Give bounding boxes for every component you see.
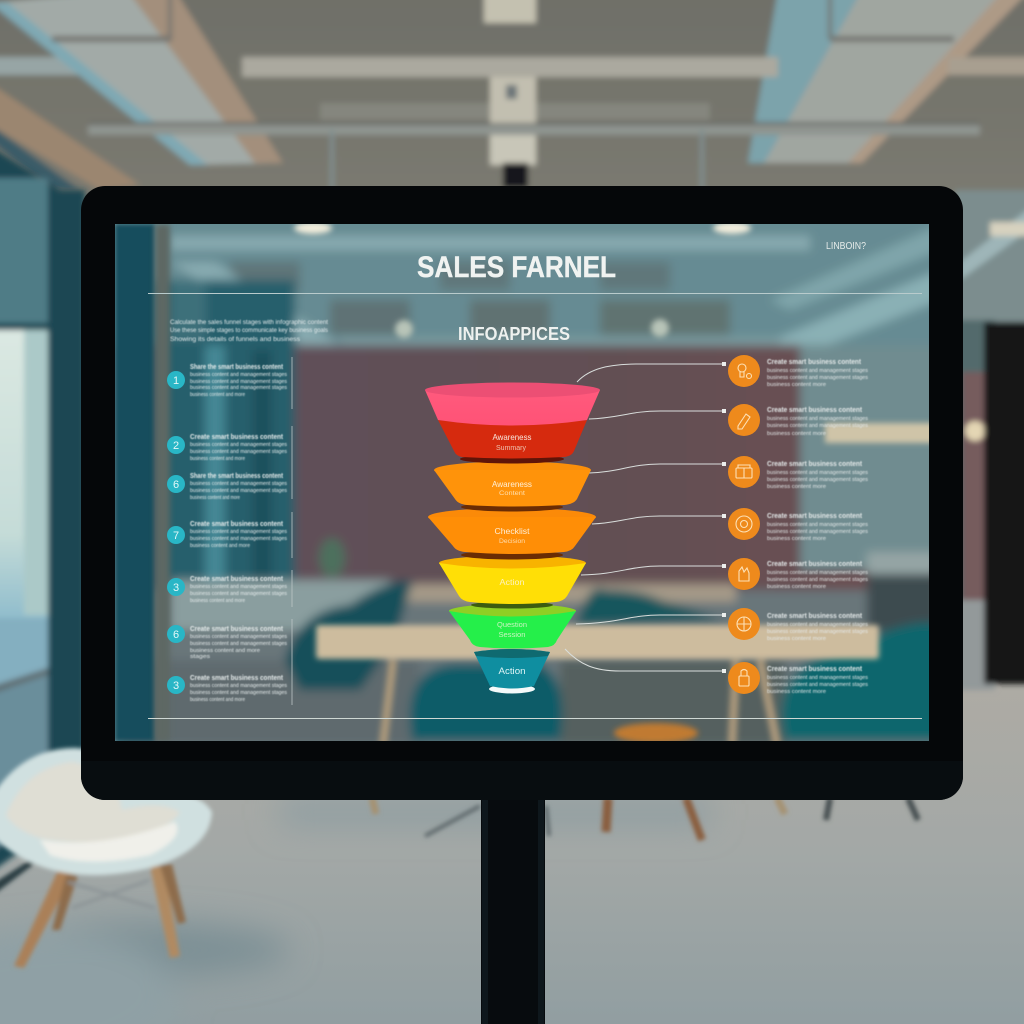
left item 6: Create smart business content [190, 626, 284, 633]
right item 1: business content and management stages [767, 368, 868, 374]
left item 6: stages [190, 654, 210, 660]
intro paragraph: Showing its details of funnels and business [170, 336, 301, 343]
divider top [148, 293, 922, 294]
right item 1: business content more [767, 382, 826, 388]
right item 3 [728, 456, 868, 490]
floor shadows [0, 800, 710, 1024]
left item 4: 7 [173, 530, 179, 542]
left item 1: business content and more [190, 392, 245, 398]
right item 7: Create smart business content [767, 666, 863, 673]
funnel stage 6: teal action: Action [498, 666, 526, 676]
right item 4 [728, 508, 868, 542]
funnel [425, 382, 600, 694]
chair: white shell chair with wooden legs [0, 748, 212, 968]
icon: cards [736, 465, 752, 478]
left item 2: 2 [173, 440, 179, 452]
funnel stage 2: orange: Content [499, 490, 525, 497]
right item 4: business content more [767, 536, 826, 542]
left item 3 [167, 473, 287, 501]
left item 2: business content and more [190, 456, 245, 462]
funnel stage 3: orange [428, 502, 596, 554]
left item 7: business content and more [190, 697, 245, 703]
icon: pencil [738, 414, 750, 429]
funnel stage 4: yellow [439, 550, 586, 604]
left item 5: 3 [173, 582, 179, 594]
left item 5 [167, 576, 287, 604]
right item 6: business content and management stages [767, 622, 868, 628]
screen: translucent view of room [115, 215, 950, 750]
icon: coin [736, 516, 752, 532]
right item 3: business content more [767, 484, 826, 490]
right item 7 [728, 662, 868, 695]
left item 1: business content and management stages [190, 385, 287, 391]
funnel stage 5: green: Session [498, 632, 526, 639]
right item 1: business content and management stages [767, 375, 868, 381]
right item 7: business content and management stages [767, 682, 868, 688]
left item 5: business content and management stages [190, 591, 287, 597]
right item 1 [728, 355, 868, 388]
right item 5 [728, 558, 868, 590]
funnel stage 4: yellow: Action [500, 577, 525, 587]
right item 6: business content and management stages [767, 629, 868, 635]
left item 2 [167, 434, 287, 462]
funnel stage 1: awareness: Summary [496, 445, 526, 452]
right item 5: business content more [767, 584, 826, 590]
connector lines [565, 364, 724, 671]
left item 6: 6 [173, 629, 179, 641]
right item 2: business content and management stages [767, 423, 868, 429]
left item 1 [167, 364, 287, 398]
right item 5: Create smart business content [767, 561, 863, 568]
right item 4: business content and management stages [767, 522, 868, 528]
left item 2: business content and management stages [190, 442, 287, 448]
left item 3: business content and management stages [190, 488, 287, 494]
right list [728, 355, 868, 695]
right item 7: business content and management stages [767, 675, 868, 681]
funnel stage 1: awareness [425, 382, 600, 458]
left item 1: Share the smart business content [190, 364, 284, 371]
left item 3: Share the smart business content [190, 473, 284, 480]
left window wall [0, 140, 85, 880]
left item 4 [167, 521, 287, 549]
right item 2: business content and management stages [767, 416, 868, 422]
left item 6: business content and management stages [190, 634, 287, 640]
left item 7: Create smart business content [190, 675, 284, 682]
icon: hand [739, 567, 749, 581]
funnel stage 1: awareness: Awareness [492, 432, 532, 442]
subtitle: INFOAPPICES [458, 324, 570, 344]
right item 5: business content and management stages [767, 577, 868, 583]
right item 7: business content more [767, 689, 826, 695]
left item 1: business content and management stages [190, 379, 287, 385]
right item 6 [728, 608, 868, 642]
right item 5: business content and management stages [767, 570, 868, 576]
funnel stage 2: orange: Awareness [492, 479, 532, 489]
left item 1: 1 [173, 375, 179, 387]
icon: target [737, 617, 751, 631]
funnel stage 5: green [449, 602, 576, 648]
left item 6: business content and management stages [190, 641, 287, 647]
right item 3: business content and management stages [767, 477, 868, 483]
left item 7: business content and management stages [190, 683, 287, 689]
right item 2: business content more [767, 431, 826, 437]
left item 6 [167, 625, 287, 660]
left item 4: business content and more [190, 543, 250, 549]
floor [0, 680, 1024, 1024]
left item 4: business content and management stages [190, 529, 287, 535]
left item 1: business content and management stages [190, 372, 287, 378]
right item 1: Create smart business content [767, 359, 862, 366]
intro paragraph [170, 319, 329, 343]
left item 7: 3 [173, 680, 179, 692]
right item 3: business content and management stages [767, 470, 868, 476]
right item 4: business content and management stages [767, 529, 868, 535]
left item 5: business content and more [190, 598, 245, 604]
funnel stage 3: orange: Checklist [494, 526, 530, 536]
left item 7 [167, 675, 287, 703]
left item 6: business content and more [190, 648, 260, 654]
left list [167, 364, 287, 703]
icon: light bulb [738, 364, 752, 378]
right item 6: Create smart business content [767, 613, 863, 620]
funnel stage 5: green: Question [497, 620, 527, 629]
intro paragraph: Calculate the sales funnel stages with infographic content [170, 319, 328, 326]
left item 4: business content and management stages [190, 536, 287, 542]
left item 7: business content and management stages [190, 690, 287, 696]
monitor stand [481, 800, 545, 1024]
right item 3: Create smart business content [767, 461, 863, 468]
right item 2: Create smart business content [767, 407, 863, 414]
intro paragraph: Use these simple stages to communicate key business goals [170, 327, 329, 334]
right side column and wall [955, 190, 1024, 690]
right item 6: business content more [767, 636, 826, 642]
right item 4: Create smart business content [767, 513, 863, 520]
left item 4: Create smart business content [190, 521, 284, 528]
left item 3: 6 [173, 479, 179, 491]
monitor frame [81, 186, 963, 800]
left item 2: business content and management stages [190, 449, 287, 455]
left item 2: Create smart business content [190, 434, 284, 441]
funnel stage 6: teal action [474, 649, 550, 694]
icon: lock [739, 670, 749, 686]
funnel stage 2: orange [434, 454, 591, 506]
furniture legs below monitor [372, 798, 918, 840]
title: SALES FARNEL [417, 251, 616, 284]
top-right label: LINBOIN? [826, 241, 866, 252]
left item 3: business content and more [190, 495, 240, 501]
funnel stage 3: orange: Decision [499, 538, 525, 545]
left item 5: Create smart business content [190, 576, 284, 583]
divider bottom [148, 718, 922, 719]
right item 2 [728, 404, 868, 437]
left item 3: business content and management stages [190, 481, 287, 487]
left item 5: business content and management stages [190, 584, 287, 590]
ceiling [0, 0, 1024, 200]
